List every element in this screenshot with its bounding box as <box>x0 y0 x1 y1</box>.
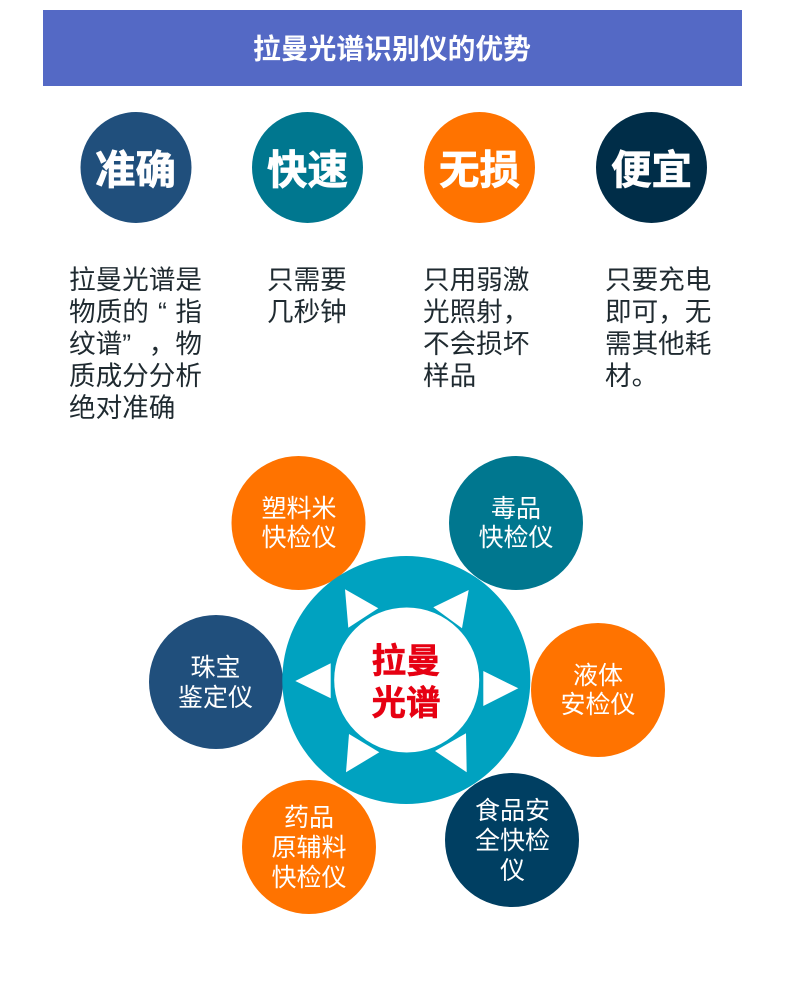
badge: 无损 <box>424 112 535 223</box>
node: 毒品快检仪 <box>449 456 583 590</box>
node: 药品原辅料快检仪 <box>242 780 376 914</box>
text block: 便宜 description: 材。 <box>605 361 658 391</box>
text block: 无损 description: 样品 <box>423 361 476 391</box>
badge: 准确 <box>80 112 192 223</box>
text block: 无损 description: 光照射， <box>423 297 529 327</box>
text block: 无损 description: 不会损坏 <box>423 329 529 359</box>
title text: 拉曼光谱识别仪的优势 <box>253 34 531 64</box>
arrow: top left <box>345 589 378 628</box>
hub label: 拉曼 <box>372 643 440 681</box>
badge: 准确: 准确 <box>95 147 176 193</box>
text block: 准确 description: 纹谱”，物 <box>69 329 202 359</box>
node: 药品原辅料快检仪: 药品 <box>284 804 334 832</box>
node: 珠宝鉴定仪 <box>149 615 283 749</box>
node: 塑料米快检仪 <box>232 456 366 590</box>
text block: 便宜 description: 只要充电 <box>605 265 711 295</box>
text block: 准确 description: 绝对准确 <box>69 393 175 423</box>
arrow: top right <box>433 590 469 628</box>
node: 液体安检仪: 液体 <box>573 662 623 690</box>
badge: 便宜 <box>596 112 707 223</box>
text block: 准确 description: 拉曼光谱是 <box>69 265 202 295</box>
text block: 快速 description <box>267 265 347 327</box>
central hub ring <box>282 556 530 804</box>
node: 液体安检仪: 安检仪 <box>560 691 636 719</box>
text block: 快速 description: 只需要 <box>267 265 347 295</box>
node: 食品安全快检仪 <box>445 773 579 907</box>
text block: 无损 description <box>423 265 529 391</box>
text block: 快速 description: 几秒钟 <box>267 297 347 327</box>
node: 毒品快检仪: 毒品 <box>491 495 541 523</box>
text block: 便宜 description: 需其他耗 <box>605 329 711 359</box>
node: 药品原辅料快检仪: 快检仪 <box>271 864 347 892</box>
text block: 便宜 description: 即可，无 <box>605 297 711 327</box>
text block: 无损 description: 只用弱激 <box>423 265 529 295</box>
node: 塑料米快检仪: 快检仪 <box>261 524 337 552</box>
arrow: right <box>483 671 518 706</box>
node: 食品安全快检仪: 仪 <box>500 857 525 885</box>
hub label: 光谱 <box>372 685 440 723</box>
badge: 快速 <box>252 112 363 223</box>
badge: 无损: 无损 <box>439 147 520 193</box>
node: 珠宝鉴定仪: 鉴定仪 <box>178 684 253 712</box>
node: 药品原辅料快检仪: 原辅料 <box>271 834 347 862</box>
node: 珠宝鉴定仪: 珠宝 <box>190 654 241 682</box>
node: 食品安全快检仪: 食品安 <box>475 797 550 825</box>
text block: 准确 description <box>69 265 202 423</box>
badge: 快速: 快速 <box>267 147 348 193</box>
arrow: bottom left <box>346 734 379 772</box>
node: 食品安全快检仪: 全快检 <box>475 827 550 855</box>
title banner <box>43 10 742 86</box>
badge: 便宜: 便宜 <box>611 147 692 193</box>
node: 毒品快检仪: 快检仪 <box>478 524 554 552</box>
text block: 准确 description: 物质的“指 <box>69 297 202 327</box>
text block: 准确 description: 质成分分析 <box>69 361 202 391</box>
arrow: bottom right <box>435 733 467 772</box>
node: 塑料米快检仪: 塑料米 <box>261 495 337 523</box>
hub label <box>372 643 440 723</box>
node: 液体安检仪 <box>531 623 665 757</box>
text block: 便宜 description <box>605 265 711 391</box>
arrow: left <box>295 663 331 698</box>
